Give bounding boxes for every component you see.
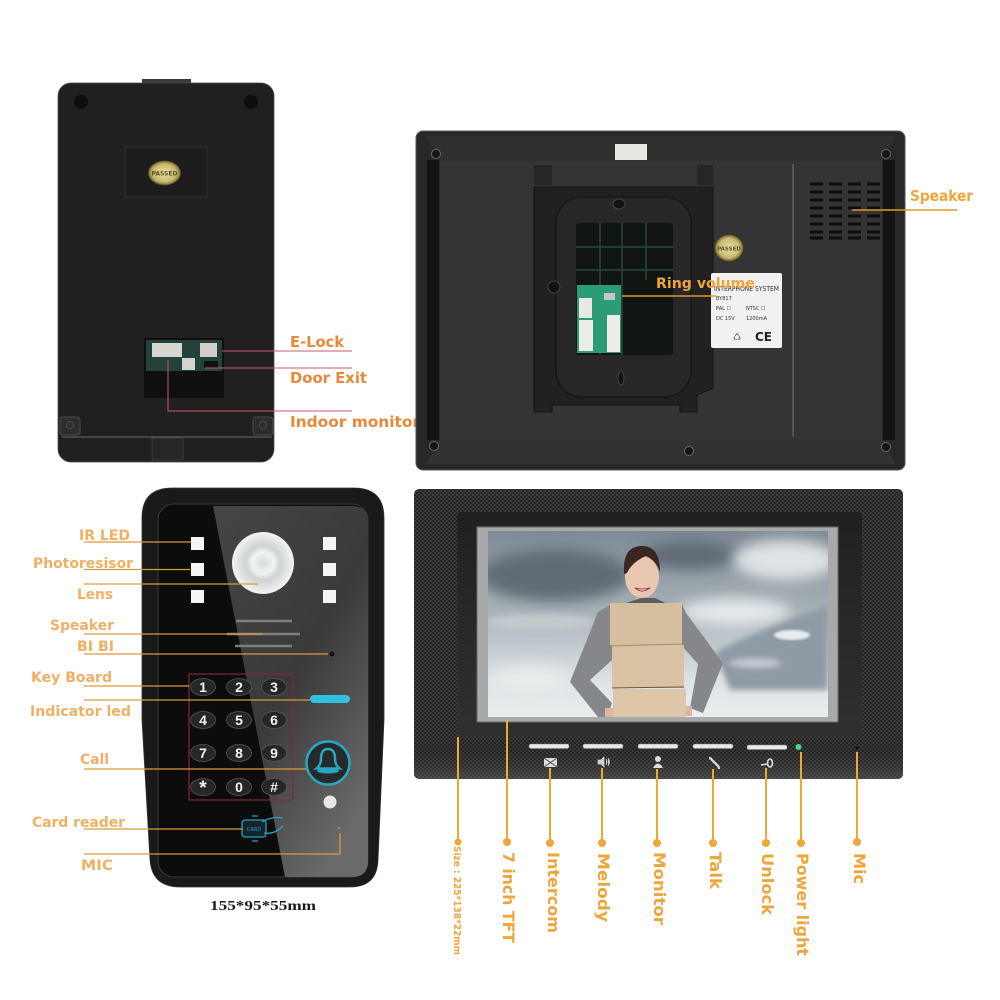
keypad: # (270, 779, 278, 795)
card reader icon: CARD (247, 827, 261, 833)
callout: Speaker (852, 187, 974, 210)
woman with boxes (570, 546, 723, 717)
indicator LED (310, 695, 350, 703)
keypad: 6 (270, 712, 278, 728)
menu buttons (529, 744, 787, 750)
white button (324, 796, 336, 808)
screen recess (477, 527, 838, 722)
specification label: ♺ (733, 333, 741, 343)
label: size: Size : 225*138*22mm (451, 846, 462, 955)
label: MIC: MIC (81, 858, 113, 874)
divider (792, 164, 794, 437)
label: Card reader: Card reader (32, 815, 125, 831)
label: Lens: Lens (77, 587, 113, 603)
callouts: rear terminals (168, 333, 421, 431)
callout: Speaker: Speaker (910, 187, 974, 205)
callout: Ring volume (622, 276, 755, 296)
line: Door Exit (205, 367, 352, 369)
specification label: 1200mA (746, 316, 768, 322)
specification label: NTSC ☐ (746, 306, 766, 312)
card reader icon (242, 816, 283, 841)
keypad: 8 (235, 745, 243, 761)
top tab (142, 79, 191, 85)
label: IR LED: IR LED (79, 528, 130, 544)
line: E-Lock (222, 350, 352, 352)
panel: indoor monitor rear view (416, 131, 905, 470)
lower band shading (414, 735, 903, 779)
bottom lip (426, 438, 895, 464)
label: Monitor: Monitor (650, 852, 669, 925)
glossy sheen (213, 506, 368, 877)
circuit window (576, 223, 673, 355)
keypad: 4 (199, 712, 207, 728)
specification label: INTERPHONE SYSTEM (714, 285, 779, 293)
label: Talk: Talk (706, 852, 725, 889)
leader lines (84, 542, 340, 854)
mic hole (856, 746, 858, 750)
screw blocks (60, 417, 273, 435)
quality seal (715, 235, 743, 261)
label: Key Board: Key Board (31, 670, 112, 686)
label: Melody: Melody (594, 853, 613, 923)
keypad: 1 (199, 679, 207, 695)
line: Indoor monitor (168, 360, 352, 411)
bottom section (62, 437, 272, 460)
speaker grille (810, 184, 883, 238)
carbon casing (414, 489, 903, 779)
call button: bell (306, 742, 350, 784)
top sticker (615, 144, 647, 160)
mic hole (338, 827, 340, 829)
keypad: * (199, 778, 207, 799)
icon: monitor (653, 756, 663, 768)
rain hood (142, 488, 384, 887)
label recess (125, 147, 207, 197)
keypad: 0 (235, 779, 243, 795)
panel: outdoor unit rear view (58, 79, 274, 462)
rear plate (440, 161, 882, 438)
specification label: PAL ☐ (716, 306, 731, 312)
icon: melody (598, 757, 610, 767)
specification label: BY817 (716, 296, 732, 302)
icon: power LED (796, 744, 802, 750)
dimension text: 155*95*55mm (210, 899, 316, 914)
buzzer hole (330, 652, 334, 656)
side recesses (427, 160, 895, 440)
terminal cut-out (144, 338, 224, 398)
label: E-Lock: E-Lock (290, 333, 345, 351)
icon: talk (709, 758, 719, 769)
label: Intercom: Intercom (544, 852, 563, 933)
outer casing (416, 131, 905, 470)
label: 7 inch TFT: 7 inch TFT (499, 852, 518, 943)
screws (430, 150, 890, 456)
specification label: DC 15V (716, 316, 735, 322)
keypad: 2 (235, 679, 243, 695)
quality seal: PASSED (717, 246, 741, 252)
label: BI BI: BI BI (77, 639, 114, 655)
label: Photoresisor: Photoresisor (33, 556, 133, 572)
camera lens (232, 532, 294, 594)
label: Indoor monitor: Indoor monitor (290, 413, 421, 431)
label: Indicator led: Indicator led (30, 704, 131, 720)
rear casing (58, 83, 274, 462)
callout: Ring volume: Ring volume (656, 276, 755, 292)
infrared LEDs (191, 537, 336, 603)
keypad: 3 (270, 679, 278, 695)
mounting holes (74, 95, 258, 109)
faceplate (158, 504, 368, 877)
screen bezel (457, 512, 862, 737)
callouts: front unit (30, 528, 340, 874)
label: Speaker: Speaker (50, 618, 114, 634)
screen picture (480, 531, 837, 717)
specification label: CE (755, 330, 772, 344)
keypad: 7 (199, 745, 207, 761)
leader lines with dots (454, 720, 861, 847)
quality seal: PASSED (152, 170, 177, 178)
mounting bracket (534, 165, 713, 412)
icon: unlock (761, 759, 772, 767)
panel: outdoor unit front view (142, 488, 384, 887)
quality seal (148, 161, 180, 185)
keypad: 9 (270, 745, 278, 761)
label: Door Exit: Door Exit (290, 369, 367, 387)
keypad (189, 674, 293, 800)
label: Power light: Power light (793, 853, 812, 956)
label: Mic: Mic (850, 853, 869, 884)
icon: intercom (544, 758, 557, 767)
panel: indoor monitor front view (414, 489, 903, 779)
speaker slots (227, 621, 300, 646)
label: Call: Call (80, 752, 109, 768)
keypad: 5 (235, 712, 243, 728)
top lip (426, 136, 895, 161)
specification label (711, 273, 782, 348)
callouts: monitor controls (451, 720, 869, 956)
label: Unlock: Unlock (758, 853, 777, 915)
